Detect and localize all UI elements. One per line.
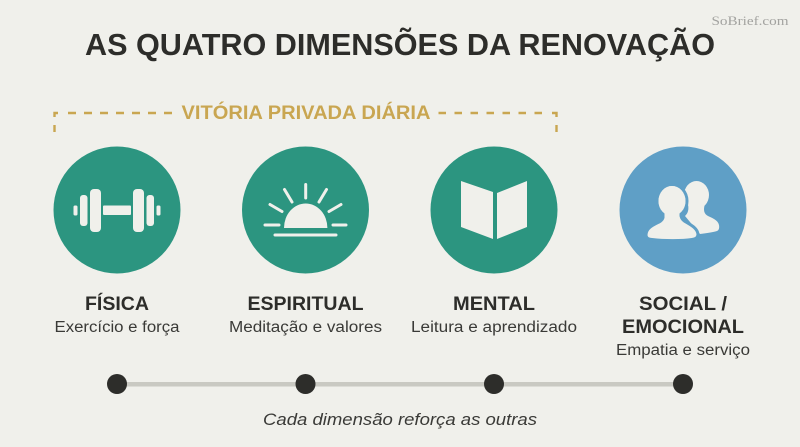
panel: social / emocional: EMOCIONAL [622,317,744,338]
icon: rising sun [265,184,346,235]
heading: espiritual: ESPIRITUAL [248,294,364,315]
description: social: Empatia e serviço [616,342,750,359]
bracket: vitória privada diária [54,100,556,132]
description: física: Exercício e força [54,319,180,336]
timeline [107,374,693,394]
description: espiritual: Meditação e valores [229,319,382,336]
title: AS QUATRO DIMENSÕES DA RENOVAÇÃO [85,26,715,62]
panel: social / emocional [616,146,750,359]
panel: espiritual [229,146,382,336]
panel: física [54,146,180,336]
bracket label: VITÓRIA PRIVADA DIÁRIA [182,100,430,124]
caption: Cada dimensão reforça as outras [263,410,538,429]
heading: física: FÍSICA [85,293,149,315]
panel: mental [411,146,577,336]
icon: open book [461,181,527,239]
icon: dumbbell [74,189,160,232]
heading: mental: MENTAL [453,294,535,315]
heading: social / emocional: SOCIAL / [639,294,728,315]
description: mental: Leitura e aprendizado [411,319,577,336]
icon: two people [646,181,719,241]
watermark: SoBrief.com [712,13,788,28]
